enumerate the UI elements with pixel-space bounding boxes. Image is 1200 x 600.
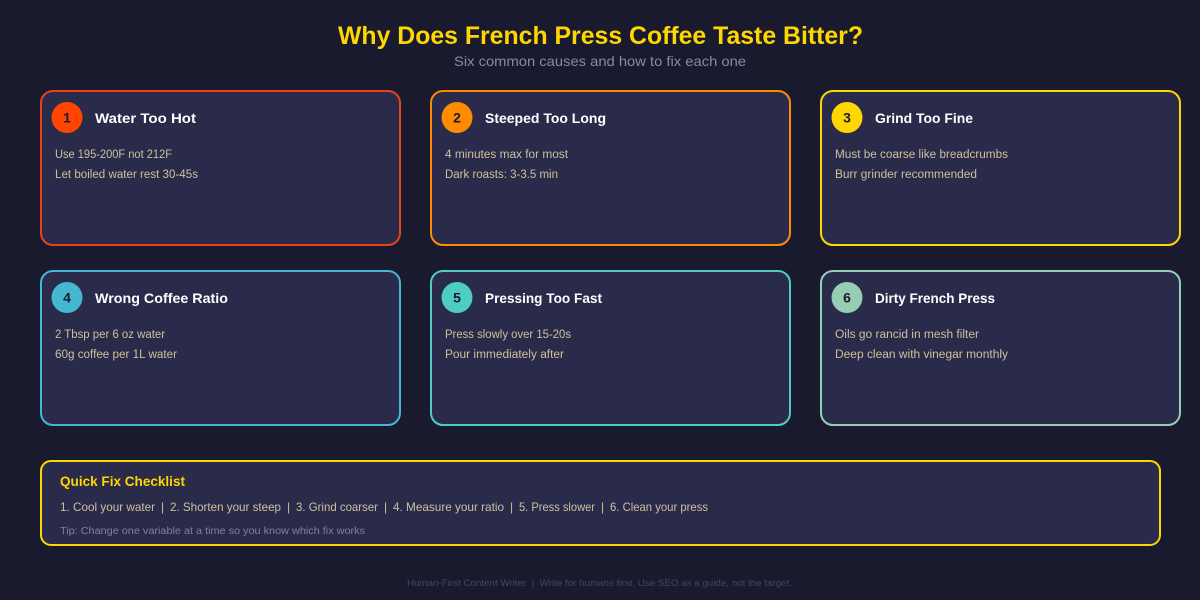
text: cause 6 fix line 1: Oils go rancid in mesh filter — [835, 329, 979, 341]
panel: cause 5 pressing too fast — [431, 271, 790, 425]
icon: number badge 2 — [442, 102, 472, 133]
text: cause 6 fix line 2: Deep clean with vinegar monthly — [835, 349, 1008, 361]
text: checklist steps — [60, 500, 708, 514]
icon: number badge 6: 6 — [843, 290, 851, 306]
icon: number badge 2: 2 — [453, 110, 461, 126]
icon: number badge 3 — [832, 102, 862, 133]
text: cause 2 fix line 2: Dark roasts: 3-3.5 min — [445, 169, 558, 181]
panel: quick fix checklist — [41, 461, 1160, 545]
heading: water too hot: Water Too Hot — [95, 110, 196, 126]
text: cause 3 fix line 1: Must be coarse like breadcrumbs — [835, 149, 1008, 161]
text: cause 5 fix line 2: Pour immediately after — [445, 349, 564, 361]
icon: number badge 4: 4 — [63, 290, 71, 306]
subtitle: Six common causes and how to fix each one — [454, 53, 746, 69]
text: checklist steps: 3. Grind coarser — [296, 500, 378, 514]
text: cause 1 fix line 2: Let boiled water rest 30-45s — [55, 169, 198, 181]
icon: number badge 5: 5 — [453, 290, 461, 306]
footer: Human-First Content Writer | Write for humans first. Use SEO as a guide, not the target. — [407, 578, 792, 589]
heading: wrong coffee ratio: Wrong Coffee Ratio — [95, 290, 228, 306]
heading: steeped too long: Steeped Too Long — [485, 110, 606, 126]
text: checklist steps: | — [384, 500, 387, 514]
text: checklist steps: | — [510, 500, 513, 514]
text: cause 4 fix line 2: 60g coffee per 1L water — [55, 349, 177, 361]
text: tip: Tip: Change one variable at a time so you know which fix works — [60, 525, 365, 537]
icon: number badge 1: 1 — [63, 110, 71, 126]
text: checklist steps: 4. Measure your ratio — [393, 500, 504, 514]
panel: cause 6 dirty french press — [821, 271, 1180, 425]
panel: cause 1 water too hot — [41, 91, 400, 245]
text: checklist steps: | — [287, 500, 290, 514]
text: cause 5 fix line 1: Press slowly over 15-20s — [445, 329, 571, 341]
text: cause 4 fix line 1: 2 Tbsp per 6 oz water — [55, 329, 165, 341]
text: cause 1 fix line 1: Use 195-200F not 212F — [55, 149, 172, 161]
heading: dirty french press: Dirty French Press — [875, 290, 995, 306]
panel: cause 2 steeped too long — [431, 91, 790, 245]
panel: cause 3 grind too fine — [821, 91, 1180, 245]
text: checklist steps: 2. Shorten your steep — [170, 500, 281, 514]
title: Why Does French Press Coffee Taste Bitter? — [338, 22, 863, 50]
heading: quick fix checklist: Quick Fix Checklist — [60, 474, 186, 489]
icon: number badge 6 — [832, 282, 862, 313]
panel: cause 4 wrong coffee ratio — [41, 271, 400, 425]
heading: grind too fine: Grind Too Fine — [875, 110, 973, 126]
heading: pressing too fast: Pressing Too Fast — [485, 290, 602, 306]
icon: number badge 4 — [52, 282, 82, 313]
icon: number badge 1 — [52, 102, 82, 133]
text: checklist steps: 1. Cool your water — [60, 500, 155, 514]
text: checklist steps: | — [161, 500, 164, 514]
icon: number badge 3: 3 — [843, 110, 851, 126]
text: cause 2 fix line 1: 4 minutes max for most — [445, 149, 569, 161]
icon: number badge 5 — [442, 282, 472, 313]
text: checklist steps: 5. Press slower — [519, 500, 595, 514]
text: checklist steps: | — [601, 500, 604, 514]
text: cause 3 fix line 2: Burr grinder recommended — [835, 169, 977, 181]
text: checklist steps: 6. Clean your press — [610, 500, 708, 514]
